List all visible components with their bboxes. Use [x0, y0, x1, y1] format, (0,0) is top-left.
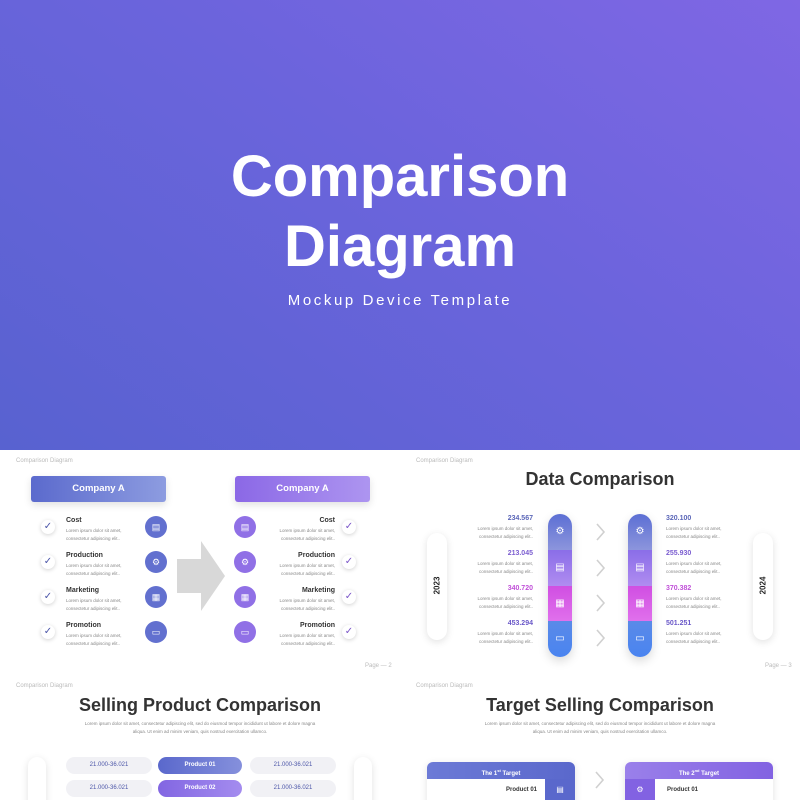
pill 2024: 2024 — [758, 577, 768, 594]
rows left: Lorem ipsum dolor sit amet, — [66, 563, 122, 568]
bar right: ▭ — [635, 633, 645, 644]
values 2023: 213.045 — [508, 550, 533, 557]
target 1 card — [427, 762, 575, 800]
values 2024: Lorem ipsum dolor sit amet, — [666, 631, 722, 636]
values 2023 — [477, 515, 533, 644]
panel: company comparison: Page — 2 — [365, 663, 392, 669]
header left — [31, 476, 166, 502]
target 2 card: Product 01 — [667, 787, 698, 793]
values 2023: 453.294 — [508, 620, 533, 627]
rows left: ✓ — [44, 556, 52, 567]
description: Lorem ipsum dolor sit amet, consectetur adipiscing elit, sed do eiusmod tempor incididunt ut labore et dolore magna — [485, 721, 715, 726]
rows left: Production — [66, 552, 103, 559]
values 2023: 340.720 — [508, 585, 533, 592]
rows right: ⚙ — [241, 557, 249, 567]
rows left: consectetur adipiscing elit.. — [66, 640, 120, 646]
rows left: Cost — [66, 517, 82, 524]
panel: data comparison: Page — 3 — [765, 663, 792, 669]
rows left: ▭ — [152, 627, 160, 637]
side pills — [28, 757, 46, 800]
description — [485, 721, 716, 734]
rows: 21.000-36.021 — [90, 785, 128, 791]
rows left: ✓ — [44, 591, 52, 602]
rows right: Lorem ipsum dolor sit amet, — [279, 598, 335, 603]
values 2023: Lorem ipsum dolor sit amet, — [477, 526, 533, 531]
rows right: Promotion — [300, 622, 335, 629]
bar left: ▦ — [555, 598, 565, 609]
description: aliqua. Ut enim ad minim veniam, quis nostrud exercitation ullamco. — [533, 728, 667, 734]
values 2023: consectetur adipiscing elit.. — [479, 638, 533, 644]
panel: target selling — [416, 682, 775, 800]
values 2024: Lorem ipsum dolor sit amet, — [666, 526, 722, 531]
chevron — [596, 772, 604, 788]
rows: 21.000-36.021 — [90, 762, 128, 768]
rows left: consectetur adipiscing elit.. — [66, 606, 120, 610]
values 2024: consectetur adipiscing elit.. — [666, 638, 720, 644]
rows right: Lorem ipsum dolor sit amet, — [279, 563, 335, 568]
values 2024: 320.100 — [666, 515, 691, 522]
chevrons — [596, 524, 605, 646]
title: Diagram — [284, 214, 516, 279]
rows right: ✓ — [345, 626, 353, 637]
rows right: consectetur adipiscing elit.. — [281, 606, 335, 610]
rows left: consectetur adipiscing elit.. — [66, 536, 120, 540]
rows left: consectetur adipiscing elit.. — [66, 570, 120, 576]
pill 2024 — [753, 533, 773, 640]
pill 2023: 2023 — [432, 577, 442, 594]
rows right: consectetur adipiscing elit.. — [281, 536, 335, 540]
title: Comparison — [231, 144, 569, 209]
bar right: ▤ — [635, 562, 645, 573]
title — [231, 144, 569, 279]
bar left: ⚙ — [556, 526, 564, 537]
header right: Company A — [276, 483, 329, 494]
rows left: ✓ — [44, 521, 52, 532]
description: aliqua. Ut enim ad minim veniam, quis nostrud exercitation ullamco. — [133, 728, 267, 734]
heading: Selling Product Comparison — [79, 695, 321, 715]
target 1 card: The 1st Target — [482, 768, 520, 777]
rows right: Lorem ipsum dolor sit amet, — [279, 633, 335, 638]
panel: data comparison — [416, 458, 792, 669]
rows left — [40, 516, 167, 646]
rows right: consectetur adipiscing elit.. — [281, 570, 335, 576]
rows: Product 01 — [184, 762, 216, 768]
panel: data comparison: Comparison Diagram — [416, 458, 473, 464]
rows left: ▦ — [152, 592, 160, 602]
bar left: ▭ — [555, 633, 565, 644]
rows left: Lorem ipsum dolor sit amet, — [66, 633, 122, 638]
rows left: ⚙ — [152, 557, 160, 567]
description: Lorem ipsum dolor sit amet, consectetur adipiscing elit, sed do eiusmod tempor incididunt ut labore et dolore magna — [85, 721, 315, 726]
rows right: Marketing — [302, 587, 335, 594]
heading: Target Selling Comparison — [486, 695, 714, 715]
values 2023: Lorem ipsum dolor sit amet, — [477, 631, 533, 636]
target 2 card: The 2nd Target — [679, 768, 719, 777]
hero banner — [0, 0, 800, 450]
pill 2023 — [427, 533, 447, 640]
rows right: Production — [298, 552, 335, 559]
panel: company comparison — [16, 458, 392, 669]
header left: Company A — [72, 483, 125, 494]
rows left: Lorem ipsum dolor sit amet, — [66, 528, 122, 533]
values 2023: Lorem ipsum dolor sit amet, — [477, 561, 533, 566]
header right — [235, 476, 370, 502]
values 2024: consectetur adipiscing elit.. — [666, 604, 720, 608]
values 2023: consectetur adipiscing elit.. — [479, 604, 533, 608]
rows right: ▭ — [241, 627, 249, 637]
target 2 card — [625, 762, 773, 800]
values 2024 — [666, 515, 722, 644]
panel: selling product — [16, 682, 374, 800]
rows right: ✓ — [345, 591, 353, 602]
values 2024: 501.251 — [666, 620, 691, 627]
rows right: Cost — [319, 517, 335, 524]
arrow — [177, 541, 225, 611]
values 2023: 234.567 — [508, 515, 533, 522]
target 1 card: Product 01 — [506, 787, 537, 793]
rows left: Marketing — [66, 587, 99, 594]
bar left — [548, 514, 572, 657]
bar right: ▦ — [635, 598, 645, 609]
subtitle: Mockup Device Template — [288, 292, 512, 309]
bar right: ⚙ — [636, 526, 644, 537]
values 2023: consectetur adipiscing elit.. — [479, 568, 533, 574]
description — [85, 721, 316, 734]
rows — [66, 757, 336, 797]
rows left: ▤ — [152, 522, 160, 532]
rows right: ✓ — [345, 521, 353, 532]
target 2 card: ⚙ — [636, 785, 644, 794]
rows right: ▤ — [241, 522, 249, 532]
rows right: Lorem ipsum dolor sit amet, — [279, 528, 335, 533]
values 2024: consectetur adipiscing elit.. — [666, 568, 720, 574]
rows right: consectetur adipiscing elit.. — [281, 640, 335, 646]
values 2024: 255.930 — [666, 550, 691, 557]
heading: Data Comparison — [525, 469, 675, 489]
rows: 21.000-36.021 — [274, 762, 312, 768]
values 2024: Lorem ipsum dolor sit amet, — [666, 596, 722, 601]
rows right: ▦ — [241, 592, 249, 602]
values 2024: consectetur adipiscing elit.. — [666, 534, 720, 538]
rows left: Lorem ipsum dolor sit amet, — [66, 598, 122, 603]
rows left: Promotion — [66, 622, 101, 629]
rows left: ✓ — [44, 626, 52, 637]
values 2023: Lorem ipsum dolor sit amet, — [477, 596, 533, 601]
values 2024: Lorem ipsum dolor sit amet, — [666, 561, 722, 566]
target 1 card: ▤ — [556, 785, 564, 794]
panel: selling product: Comparison Diagram — [16, 683, 73, 689]
panel: company comparison: Comparison Diagram — [16, 458, 73, 464]
bar left: ▤ — [555, 562, 565, 573]
rows right: ✓ — [345, 556, 353, 567]
rows right — [234, 516, 358, 646]
values 2024: 370.382 — [666, 585, 691, 592]
panel: target selling: Comparison Diagram — [416, 683, 473, 689]
rows: 21.000-36.021 — [274, 785, 312, 791]
bar right — [628, 514, 652, 657]
rows: Product 02 — [184, 785, 216, 791]
values 2023: consectetur adipiscing elit.. — [479, 534, 533, 538]
